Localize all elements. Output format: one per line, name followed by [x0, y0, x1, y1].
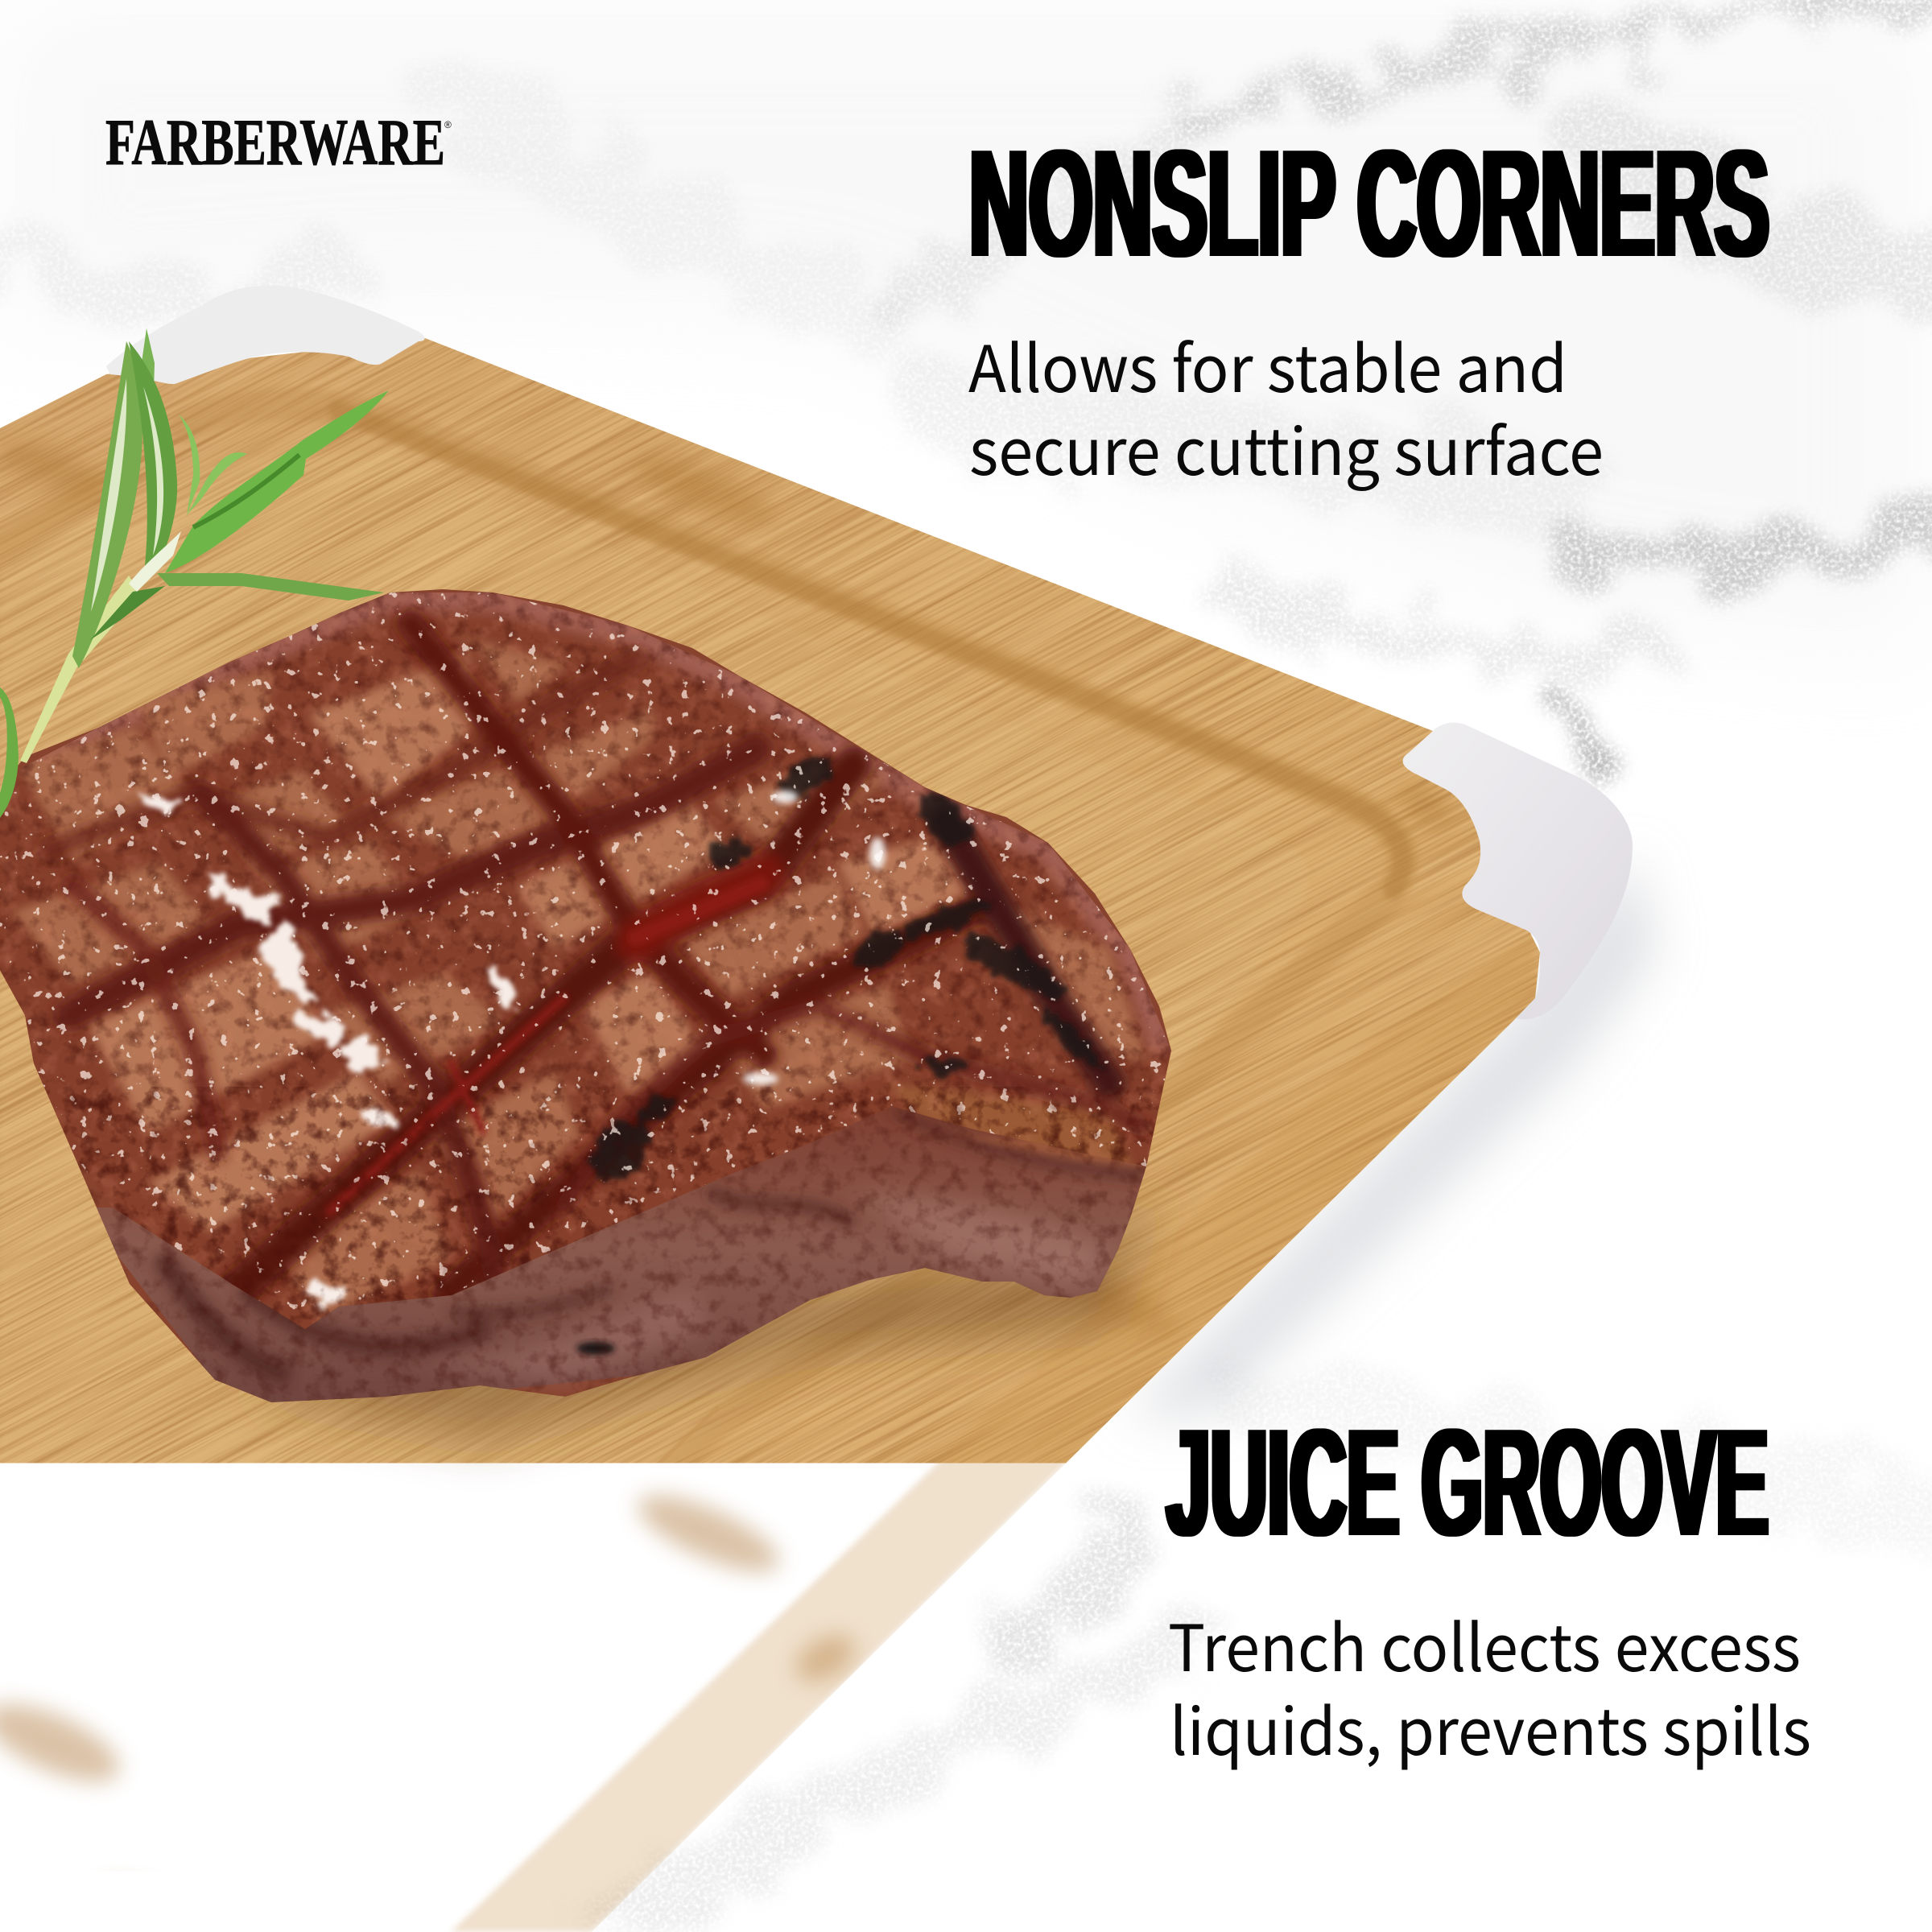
juice groove channel: [0, 404, 1402, 1932]
long left leaf: [72, 341, 142, 668]
text: juice groove description: liquids, prevents spills: [1170, 1681, 1811, 1774]
text: juice groove description: [1168, 1597, 1811, 1774]
logo: FARBERWARE: [105, 105, 445, 179]
text: juice groove description: Trench collects excess: [1168, 1597, 1801, 1690]
bamboo node bands: [0, 431, 1456, 1932]
side-face grain: [0, 1087, 1208, 1417]
small sprouts: [179, 415, 200, 515]
juice highlights: [137, 793, 519, 1308]
meat texture: [0, 564, 1208, 1368]
steak shadow: [242, 1183, 1159, 1441]
nonslip corner: top left: [106, 285, 425, 384]
lower stem leaf: [90, 586, 165, 640]
big right leaf: [165, 390, 389, 573]
steak side face: [80, 1106, 1167, 1417]
board shadow: [1127, 853, 1658, 1417]
second leaf: [129, 341, 177, 576]
nonslip corner: bottom right: [1403, 723, 1633, 1019]
grill marks: [49, 624, 1143, 1295]
side-face darker folds: [161, 1111, 1143, 1377]
text: nonslip description: [968, 318, 1604, 494]
glints: [0, 564, 1208, 1368]
grilled steak: [0, 564, 1208, 1417]
sprig junction: [129, 531, 181, 592]
plateau surface: [0, 451, 1308, 1932]
logo: ®: [444, 119, 452, 130]
small back leaf tip: [142, 328, 155, 419]
char marks: [580, 751, 1106, 1192]
text: nonslip description: Allows for stable and: [968, 318, 1567, 411]
steak outer pink rim: [24, 600, 1163, 1051]
rosemary sprig: [0, 328, 389, 818]
lit meat tiles: [12, 632, 1146, 1319]
low right leaf: [157, 573, 384, 601]
text: nonslip description: secure cutting surface: [969, 401, 1604, 494]
left edge leaf: [0, 687, 19, 818]
glossy juice in marks: [330, 884, 761, 1212]
board edge strip: [451, 938, 1535, 1932]
stem: [20, 576, 141, 763]
